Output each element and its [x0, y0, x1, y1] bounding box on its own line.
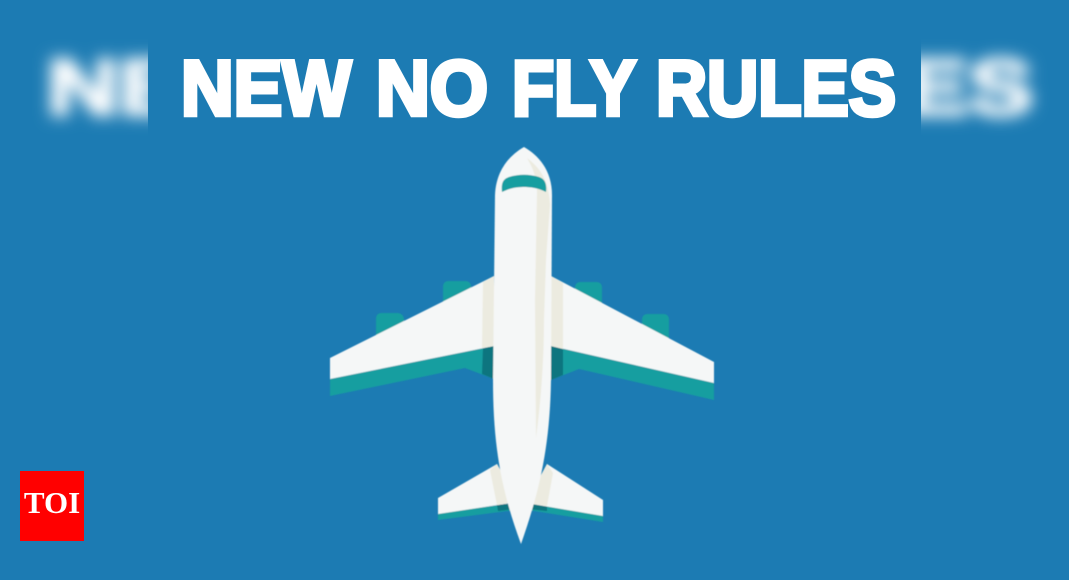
- left tail shadow: [497, 503, 515, 511]
- title: FLY: [512, 44, 636, 132]
- right tail underside: [528, 503, 603, 522]
- right wing root shadow: [551, 346, 563, 380]
- left wing root: [482, 276, 494, 348]
- right wing root: [551, 276, 563, 349]
- right outer engine: [642, 314, 669, 340]
- right tail: [526, 464, 603, 516]
- right wing: [551, 276, 714, 383]
- logo: TOI: TOI: [24, 485, 80, 520]
- left inner engine: [443, 281, 471, 306]
- left wing underside: [330, 346, 494, 396]
- fuselage shading: [527, 158, 550, 438]
- blurred title backdrop: NEW: [47, 43, 279, 131]
- right inner engine: [575, 282, 602, 306]
- blurred title backdrop: FLY: [497, 43, 667, 131]
- left outer engine: [376, 313, 404, 340]
- title: [181, 44, 896, 132]
- blurred title backdrop: [47, 43, 1033, 131]
- cockpit window: [502, 175, 546, 192]
- logo: TOI: [20, 471, 84, 541]
- left tail: [438, 464, 518, 514]
- fuselage: [493, 147, 552, 544]
- title: RULES: [656, 44, 896, 132]
- right wing underside: [551, 346, 714, 400]
- left wing root shadow: [482, 346, 494, 379]
- right tail root: [526, 464, 553, 506]
- left tail root: [490, 464, 518, 505]
- left tail underside: [438, 503, 515, 520]
- blurred title backdrop: NO: [313, 43, 467, 131]
- blurred title backdrop: RULES: [704, 43, 1033, 131]
- left wing: [330, 276, 494, 379]
- centre panel: [148, 0, 921, 580]
- right tail shadow: [528, 503, 547, 511]
- icon: airplane: [330, 147, 714, 544]
- title: NO: [376, 44, 488, 132]
- title: NEW: [181, 44, 351, 132]
